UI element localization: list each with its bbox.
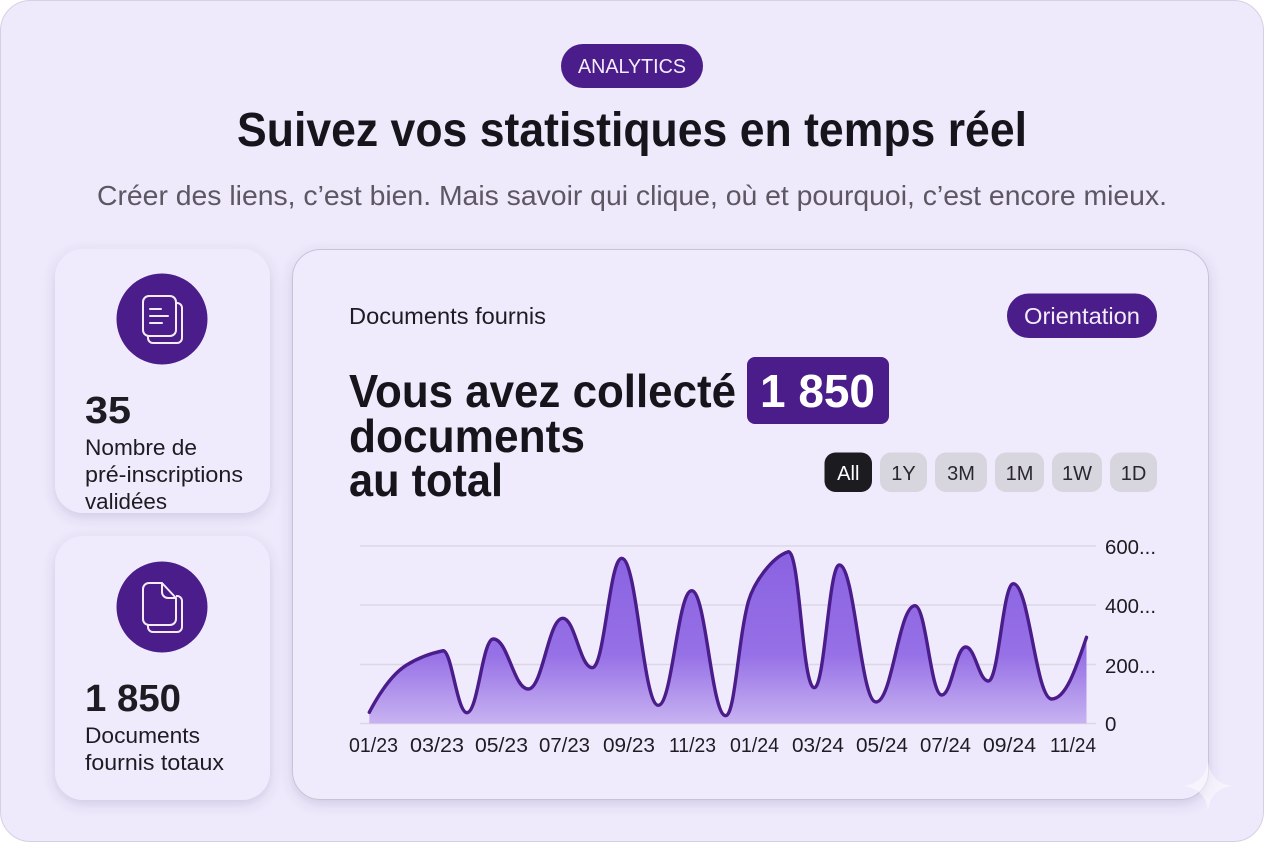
y axis labels: 0	[1105, 713, 1116, 736]
badge: orientation: Orientation	[1024, 303, 1140, 329]
x axis labels: 03/24	[792, 735, 844, 757]
panel: main chart card	[292, 250, 1208, 800]
time range filters: 3M	[947, 463, 975, 485]
time range filters	[824, 452, 1157, 492]
icon: document with text lines	[116, 274, 208, 364]
x axis labels: 11/24	[1050, 735, 1096, 757]
y axis labels: 400...	[1105, 595, 1156, 618]
time range filters: 1W	[1062, 463, 1092, 485]
y axis labels: 200...	[1105, 655, 1156, 678]
chart area fill	[369, 552, 1086, 724]
time range filters: 1M	[1006, 463, 1033, 485]
y axis labels: 600...	[1105, 536, 1156, 559]
x axis labels: 01/24	[730, 735, 779, 757]
x axis labels: 05/24	[856, 735, 908, 757]
x axis labels: 11/23	[669, 735, 716, 757]
y axis labels	[1105, 536, 1156, 736]
highlighted total: 1 850: 1 850	[760, 365, 875, 417]
subtitle: Créer des liens, c’est bien. Mais savoir qui clique, où et pourquoi, c’est encore mieux.	[97, 180, 1167, 211]
x axis labels: 07/23	[539, 735, 590, 757]
card label: Documents fournis	[349, 303, 546, 329]
x axis labels: 03/23	[410, 735, 464, 757]
stat label: pre-registrations: Nombre de	[85, 435, 197, 460]
icon: sparkle watermark	[1184, 762, 1232, 810]
time range filters: 1D	[1121, 463, 1146, 485]
badge: analytics	[561, 44, 703, 88]
panel: pre-registrations stat card	[55, 249, 270, 514]
time range filters: 1Y	[891, 463, 916, 485]
stat label: pre-registrations: pré-inscriptions	[85, 462, 243, 487]
headline: documents	[349, 410, 585, 462]
headline: Vous avez collecté	[349, 365, 736, 417]
x axis labels: 07/24	[920, 735, 971, 757]
area chart	[349, 536, 1156, 757]
stat label: documents: fournis totaux	[85, 750, 224, 775]
highlighted total: 1 850	[747, 357, 889, 424]
x axis labels: 05/23	[475, 735, 528, 757]
stat value: 35: 35	[85, 390, 131, 432]
stat label: documents: Documents	[85, 723, 200, 748]
headline: au total	[349, 454, 503, 506]
x axis labels: 09/23	[603, 735, 655, 757]
stat label: documents	[85, 723, 224, 775]
chart line	[369, 552, 1086, 716]
panel: documents stat card	[55, 536, 270, 800]
stat value: 1 850: 1 850	[85, 678, 181, 720]
time range filters: All	[837, 463, 859, 485]
icon: stacked documents	[116, 562, 208, 652]
stat label: pre-registrations	[85, 435, 243, 514]
badge: analytics: ANALYTICS	[578, 56, 686, 78]
badge: orientation	[1007, 294, 1157, 338]
x axis labels: 01/23	[349, 735, 398, 757]
x axis labels: 09/24	[983, 735, 1036, 757]
stat label: pre-registrations: validées	[85, 489, 167, 514]
headline	[349, 365, 736, 506]
title: Suivez vos statistiques en temps réel	[237, 104, 1027, 157]
x axis labels	[349, 735, 1096, 757]
